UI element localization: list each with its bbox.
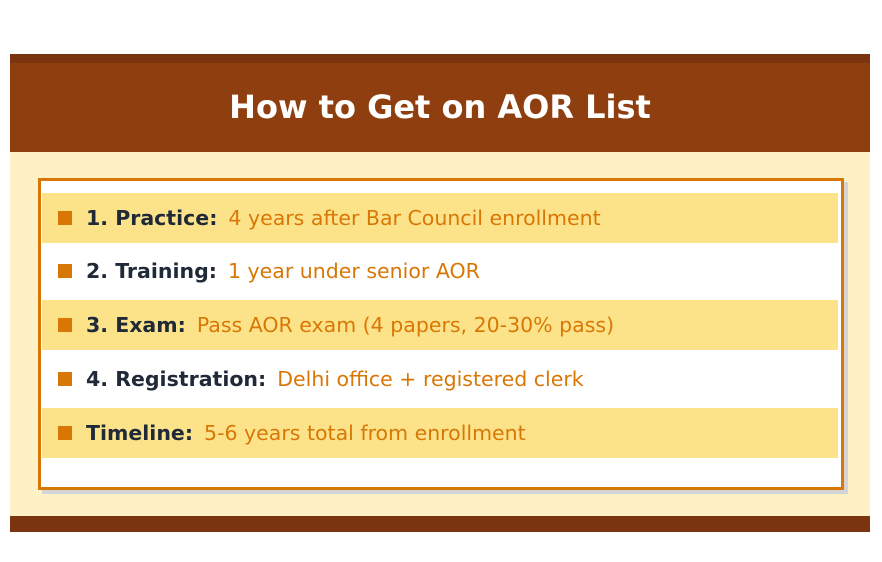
- row 1: 1. Practice:: [86, 206, 217, 230]
- title: How to Get on AOR List: [229, 88, 651, 126]
- row 1: [42, 193, 838, 243]
- row 2: [58, 259, 480, 283]
- footer bar: [10, 516, 870, 532]
- row 2: 2. Training:: [86, 259, 217, 283]
- row 4: Delhi office + registered clerk: [277, 367, 584, 391]
- row 3: 3. Exam:: [86, 313, 186, 337]
- row 3: [42, 300, 838, 350]
- row 5: 5-6 years total from enrollment: [204, 421, 526, 445]
- header: [10, 63, 870, 152]
- row 1: 4 years after Bar Council enrollment: [228, 206, 601, 230]
- list box: [38, 178, 844, 490]
- row 4: 4. Registration:: [86, 367, 266, 391]
- top band: [10, 54, 870, 64]
- cream panel: [10, 152, 870, 516]
- row 4: [58, 367, 584, 391]
- row 2: 1 year under senior AOR: [228, 259, 480, 283]
- row 5: [42, 408, 838, 458]
- row 5: Timeline:: [86, 421, 193, 445]
- row 3: Pass AOR exam (4 papers, 20-30% pass): [197, 313, 614, 337]
